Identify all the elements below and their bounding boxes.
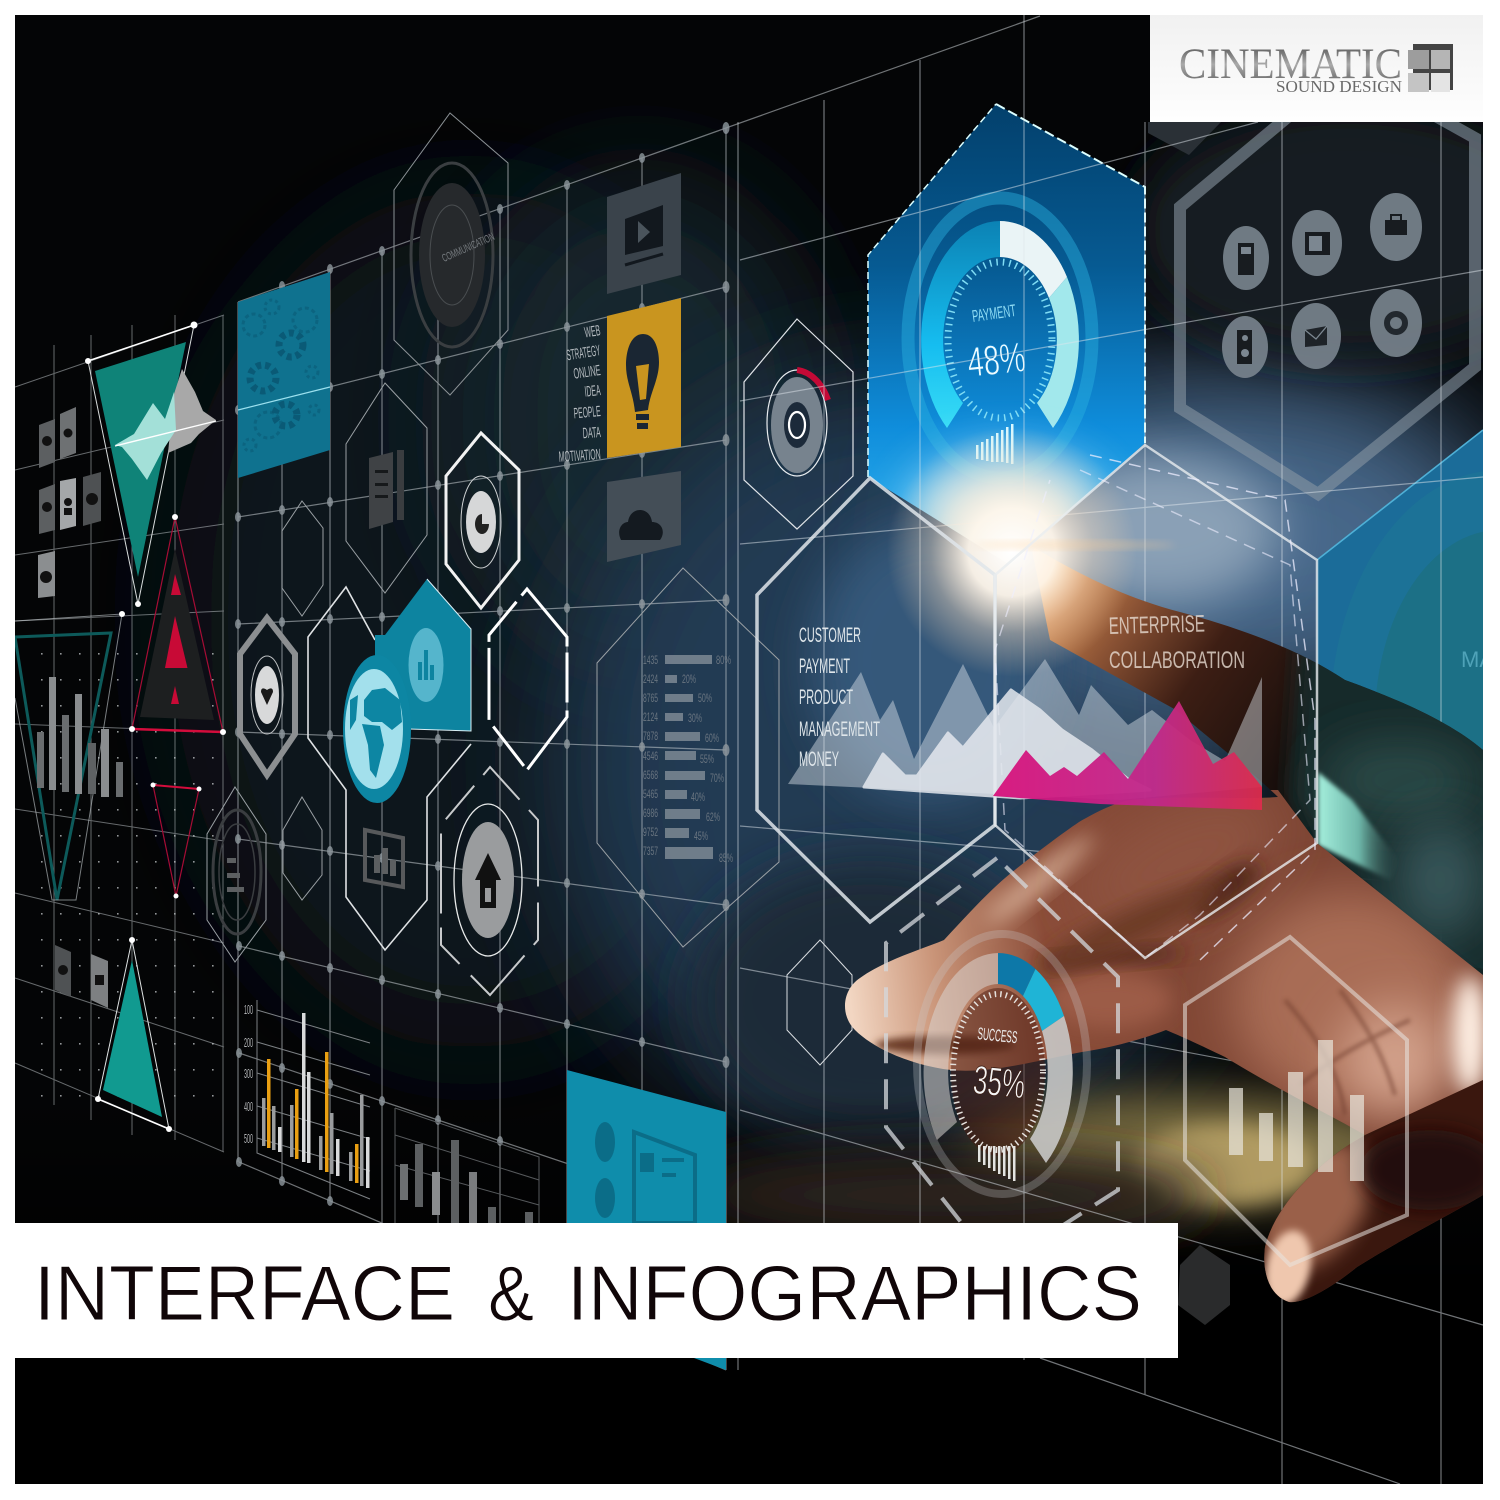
dashed white hexagon [489, 589, 567, 770]
customer text block: MONEY [799, 748, 839, 771]
teal outline triangles [15, 611, 125, 900]
list words: strategy: WEB [583, 322, 602, 341]
orange bar chart: 100 [244, 1002, 253, 1017]
video tile [607, 173, 681, 294]
left icon tiles [38, 407, 101, 598]
table of values: 2424 [643, 672, 658, 686]
logo panel [1150, 15, 1483, 122]
grid lines: left panel [15, 315, 224, 1152]
teal layout panel [567, 1070, 726, 1370]
table of values: 6986 [643, 806, 658, 820]
dark top small hexagon [1148, 122, 1221, 155]
success gauge [886, 858, 1118, 1240]
text: PEOPLE [573, 403, 601, 422]
clock hexagon [446, 433, 519, 608]
small red triangle [150, 782, 202, 898]
list words: strategy [558, 322, 602, 466]
left bar chart [37, 677, 123, 797]
large hexagon outline [757, 478, 995, 922]
orange bar chart: 500 [244, 1131, 253, 1146]
list hexagon gauge [213, 810, 261, 934]
globe and chart cluster [308, 579, 471, 950]
target gauge hexagon [744, 319, 853, 529]
text: IDEA [584, 382, 601, 401]
table of values: 6568 [643, 768, 658, 782]
yellow bulb tile [607, 298, 681, 458]
grid nodes [235, 122, 730, 1206]
success gauge: 35% [971, 1058, 1027, 1107]
list words: strategy: ONLINE [572, 362, 602, 383]
right blue hexagon: MA [1461, 647, 1494, 672]
table of values: 7878 [643, 729, 658, 743]
heart hexagon [240, 618, 295, 775]
enterprise collaboration text [1108, 610, 1245, 674]
table of values: 30% [688, 711, 702, 725]
table of values: 2124 [643, 710, 658, 724]
gray grid chart [395, 1108, 539, 1223]
list words: strategy: DATA [582, 424, 601, 442]
table of values: 20% [682, 672, 696, 686]
teal inverted triangle with waveform [85, 322, 216, 607]
red triangle with arrows [129, 514, 226, 735]
main blue hexagon: payment gauge: PAYMENT [971, 301, 1017, 326]
text: MOTIVATION [558, 446, 601, 466]
globe hexagon: communication [394, 113, 508, 395]
table of values: 70% [710, 771, 724, 785]
table of values: 40% [691, 790, 705, 804]
table of values: 50% [698, 691, 712, 705]
cloud tile [607, 471, 681, 562]
mountain charts [788, 659, 1262, 810]
table of values: 5465 [643, 787, 658, 801]
table of values: 62% [706, 810, 720, 824]
table of values: 4546 [643, 749, 658, 763]
table of values: 9752 [643, 825, 658, 839]
right panel grid lines [738, 15, 1483, 1484]
customer text block: CUSTOMER [799, 624, 861, 647]
table of values [643, 653, 733, 865]
enterprise collaboration text: COLLABORATION [1109, 647, 1245, 674]
globe hexagon: communication: COMMUNICATION [440, 231, 496, 265]
customer text block: PRODUCT [799, 686, 853, 709]
table of values: 60% [705, 731, 719, 745]
title band: INFOGRAPHICS [567, 1249, 1142, 1337]
small dark hexagon at bottom [1178, 1245, 1230, 1325]
hand [840, 540, 1500, 1320]
title band: & [488, 1249, 534, 1337]
orange bar chart: 300 [244, 1066, 253, 1081]
title band: INTERFACE [34, 1249, 455, 1337]
table of values: 8765 [643, 691, 658, 705]
table of values: 85% [719, 851, 733, 865]
grid lines: centre panel [238, 16, 1040, 1370]
display icon [365, 830, 403, 887]
table of values: 45% [694, 829, 708, 843]
enterprise collaboration text: ENTERPRISE [1108, 610, 1205, 640]
lower teal triangle [55, 937, 172, 1132]
logo panel: CINEMATIC [1179, 41, 1402, 88]
thin hexagons [207, 501, 852, 1065]
home hexagon [441, 767, 538, 995]
title band [15, 1223, 1178, 1358]
orange bar chart [244, 1000, 370, 1199]
fingertip glow [887, 427, 1175, 677]
right blue hexagon [1317, 430, 1500, 970]
table of values: 55% [700, 752, 714, 766]
customer text block [799, 624, 880, 771]
orange bar chart: 400 [244, 1099, 253, 1114]
success gauge: SUCCESS [977, 1024, 1018, 1047]
table of values: 80% [716, 653, 731, 667]
table of values: 1435 [643, 653, 658, 667]
dot grid [30, 640, 225, 1120]
table of values: 7357 [643, 844, 658, 858]
logo panel: SOUND DESIGN [1276, 77, 1402, 96]
teal gears panel [238, 272, 330, 478]
text: STRATEGY [565, 342, 602, 364]
enterprise hexagon outline [995, 445, 1317, 960]
main blue hexagon: payment gauge [868, 104, 1145, 575]
orange bar chart: 200 [244, 1035, 253, 1050]
main blue hexagon: payment gauge: 48% [965, 333, 1028, 386]
right icon hexagon [1180, 85, 1475, 494]
lower right hexagon with bars [1185, 937, 1407, 1265]
customer text block: PAYMENT [799, 655, 850, 678]
customer text block: MANAGEMENT [799, 718, 880, 741]
document hexagon [346, 383, 427, 593]
